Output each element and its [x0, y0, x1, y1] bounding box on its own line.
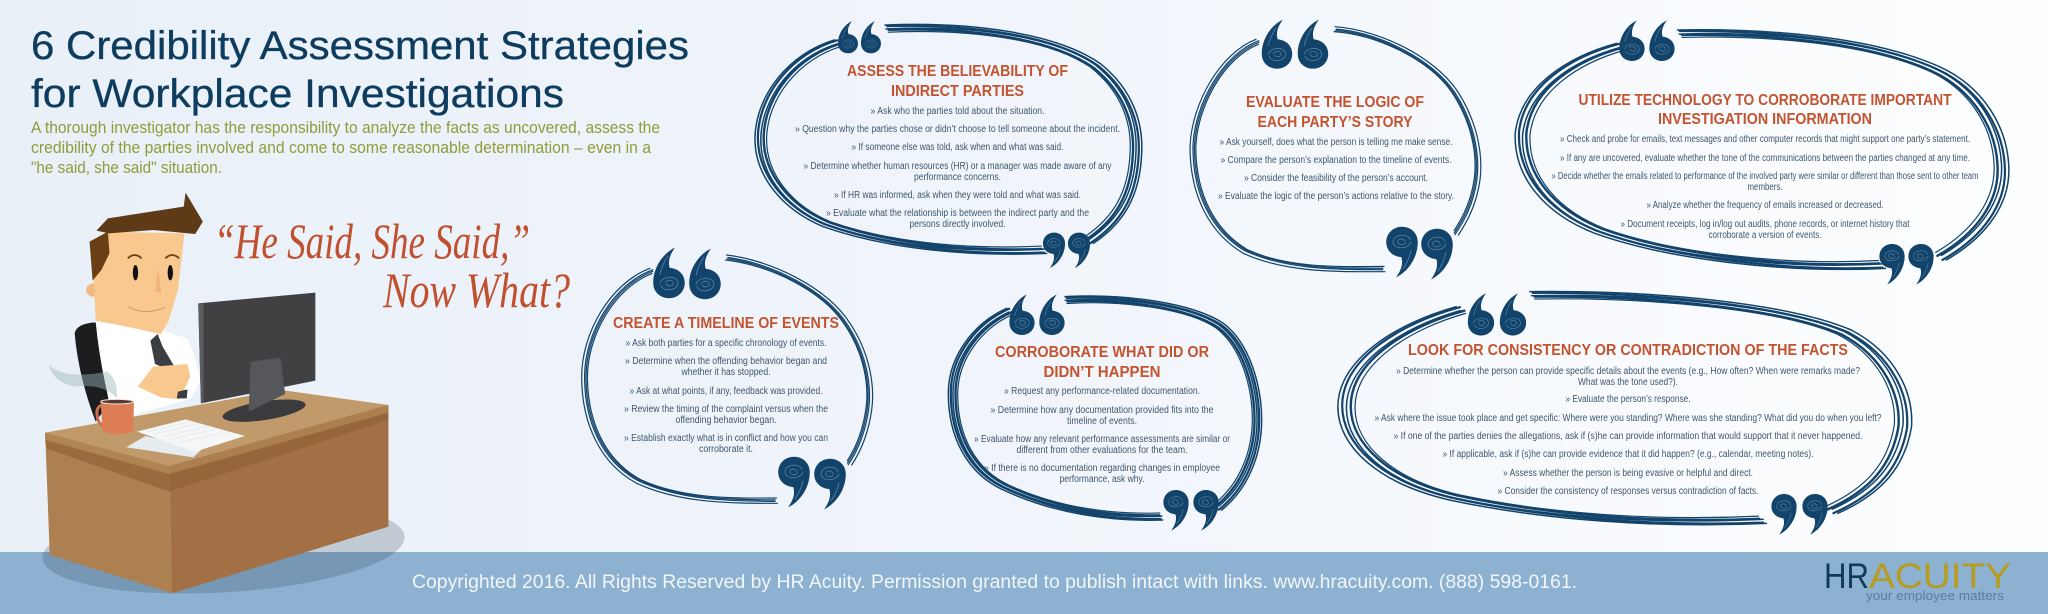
intro text: credibility of the parties involved and come to some reasonable determination – even in a [31, 139, 652, 157]
bullet text: What was the tone used?). [1578, 377, 1678, 388]
closing quote marks [778, 457, 846, 510]
desk [45, 390, 388, 593]
logo: HR Acuity: your employee matters [1866, 588, 2005, 603]
intro text [31, 119, 660, 177]
bullet text [974, 386, 1231, 485]
panel: assess the believability of indirect parties [755, 21, 1142, 268]
bullet text: » Assess whether the person is being evasive or helpful and direct. [1503, 468, 1753, 479]
script heading: “He Said, She Said,” [214, 213, 530, 269]
script heading [214, 213, 570, 318]
bullet text: » Ask at what points, if any, feedback was provided. [630, 386, 822, 397]
bullet text: members. [1748, 182, 1782, 193]
opening quote marks [1262, 20, 1328, 69]
bullet text [624, 338, 828, 455]
bullet text: » Determine how any documentation provided fits into the [990, 405, 1214, 416]
opening quote marks [1009, 294, 1065, 335]
bullet text: » Ask where the issue took place and get specific: Where were you standing? Where was she standing? What did you do when you left? [1374, 413, 1882, 424]
heading: LOOK FOR CONSISTENCY OR CONTRADICTION OF THE FACTS [1408, 342, 1848, 359]
heading: EACH PARTY’S STORY [1258, 114, 1413, 131]
heading [1578, 92, 1952, 128]
intro text: A thorough investigator has the responsibility to analyze the facts as uncovered, assess the [31, 119, 660, 137]
intro text: "he said, she said" situation. [31, 159, 222, 177]
bullet text: offending behavior began. [676, 415, 776, 426]
logo: HR Acuity: HR [1824, 557, 1869, 596]
panel: corroborate what did or didn't happen [948, 294, 1262, 531]
heading: UTILIZE TECHNOLOGY TO CORROBORATE IMPORTANT [1578, 92, 1952, 109]
closing quote marks [1163, 490, 1219, 531]
tie [150, 334, 175, 371]
bullet text: » Evaluate the person’s response. [1566, 394, 1690, 405]
bullet text: timeline of events. [1067, 416, 1137, 427]
bullet text: » Review the timing of the complaint versus when the [624, 404, 828, 415]
scribbled speech frame [1190, 27, 1481, 272]
bullet text: persons directly involved. [910, 219, 1006, 230]
bullet text: » Evaluate the logic of the person’s actions relative to the story. [1218, 191, 1454, 202]
bullet text: » Ask who the parties told about the situation. [870, 106, 1044, 117]
bullet text [1374, 366, 1882, 497]
opening quote marks [1468, 293, 1526, 336]
title: for Workplace Investigations [31, 72, 564, 116]
scribbled speech frame [1338, 291, 1912, 525]
illustration: man at desk [39, 193, 408, 603]
bullet text: » Analyze whether the frequency of emails increased or decreased. [1646, 200, 1884, 211]
panel: evaluate the logic of each party's story [1190, 20, 1481, 280]
bullet text: » Consider the feasibility of the person’s account. [1244, 173, 1428, 184]
closing quote marks [1043, 233, 1090, 268]
closing quote marks [1879, 244, 1934, 285]
heading [847, 63, 1068, 100]
bullet text: » Document receipts, log in/log out audits, phone records, or internet history that [1620, 219, 1910, 230]
bullet text: whether it has stopped. [681, 367, 770, 378]
steam [49, 365, 117, 398]
bullet text: » Determine whether human resources (HR) or a manager was made aware of any [804, 161, 1112, 172]
chair [75, 322, 109, 422]
closing quote marks [1771, 494, 1828, 535]
desk shadow [39, 491, 408, 603]
bullet text: » Evaluate how any relevant performance assessments are similar or [974, 434, 1231, 445]
heading: INDIRECT PARTIES [891, 83, 1024, 100]
title [31, 24, 689, 116]
scribbled speech frame [755, 24, 1142, 254]
bullet text: » If there is no documentation regarding changes in employee [984, 463, 1220, 474]
opening quote marks [1619, 20, 1675, 61]
bullet text: » Determine when the offending behavior began and [625, 356, 827, 367]
opening quote marks [653, 248, 721, 299]
head [86, 193, 203, 334]
bullet text [1552, 134, 1978, 241]
arms [138, 364, 190, 399]
bullet text: » Evaluate what the relationship is between the indirect party and the [826, 208, 1089, 219]
bullet text: » Request any performance-related documentation. [1004, 386, 1200, 397]
scribbled speech frame [582, 255, 873, 503]
panel: look for consistency or contradiction [1338, 291, 1912, 535]
bullet text: » If one of the parties denies the allegations, ask if (s)he can provide information that would support that it never happened. [1394, 431, 1862, 442]
footer band [0, 552, 2048, 614]
bullet text: performance, ask why. [1060, 474, 1144, 485]
heading: EVALUATE THE LOGIC OF [1246, 94, 1424, 111]
bullet text [795, 106, 1120, 230]
closing quote marks [1386, 227, 1453, 280]
bullet text: » Establish exactly what is in conflict and how you can [624, 433, 828, 444]
scribbled speech frame [1515, 29, 2009, 270]
shirt [96, 322, 201, 415]
bullet text: » Ask both parties for a specific chronology of events. [626, 338, 826, 349]
heading: CREATE A TIMELINE OF EVENTS [613, 315, 839, 332]
panel: utilize technology [1515, 20, 2009, 285]
bullet text: different from other evaluations for the team. [1016, 445, 1188, 456]
bullet text: » If HR was informed, ask when they were told and what was said. [834, 190, 1081, 201]
bullet text: » Compare the person’s explanation to the timeline of events. [1220, 155, 1452, 166]
bullet text: » If someone else was told, ask when and what was said. [852, 142, 1064, 153]
heading: CORROBORATE WHAT DID OR [995, 344, 1209, 361]
bullet text: » Consider the consistency of responses versus contradiction of facts. [1498, 486, 1758, 497]
bullet text [1218, 137, 1454, 202]
monitor [198, 293, 315, 426]
panel: create a timeline of events [582, 248, 873, 510]
footer copyright text: Copyrighted 2016. All Rights Reserved by HR Acuity. Permission granted to publish intact with links. www.hracuity.com. (888) 598-0161. [412, 572, 1577, 593]
bullet text: » Question why the parties chose or didn’t choose to tell someone about the incident. [795, 124, 1120, 135]
logo: HR Acuity: ACUITY [1869, 557, 2011, 596]
title: 6 Credibility Assessment Strategies [31, 24, 689, 68]
heading: INVESTIGATION INFORMATION [1658, 111, 1872, 128]
script heading: Now What? [382, 262, 570, 318]
heading: ASSESS THE BELIEVABILITY OF [847, 63, 1068, 80]
coffee mug [97, 399, 134, 434]
scribbled speech frame [948, 296, 1262, 520]
bullet text: corroborate it. [699, 444, 753, 455]
papers [126, 419, 245, 457]
heading: DIDN’T HAPPEN [1044, 364, 1160, 381]
heading [1246, 94, 1424, 131]
bullet text: » Determine whether the person can provide specific details about the events (e.g., How often? When were remarks made? [1396, 366, 1860, 377]
bullet text: performance concerns. [914, 172, 1001, 183]
bullet text: » If applicable, ask if (s)he can provide evidence that it did happen? (e.g., calendar, meeting notes). [1442, 449, 1814, 460]
heading [995, 344, 1209, 381]
opening quote marks [838, 21, 881, 53]
bullet text: corroborate a version of events. [1708, 230, 1822, 241]
bullet text: » Ask yourself, does what the person is telling me make sense. [1220, 137, 1452, 148]
logo: HR Acuity [1824, 557, 2011, 603]
